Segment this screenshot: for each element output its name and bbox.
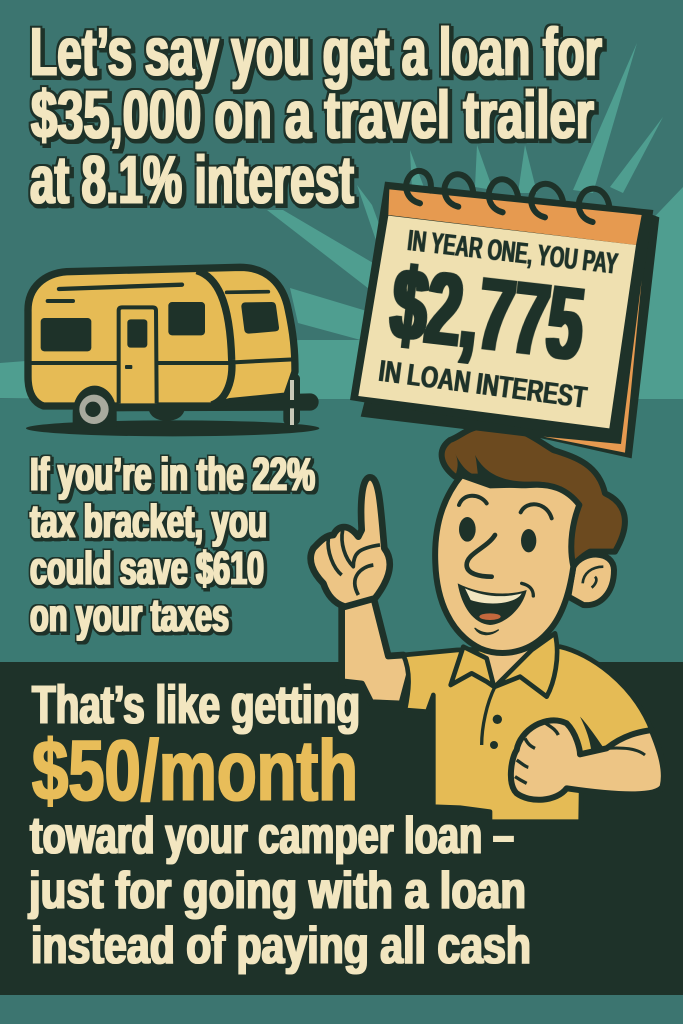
text block: tax bracket savings: on your taxes	[30, 589, 229, 641]
title	[30, 14, 602, 218]
man eyes	[459, 517, 536, 552]
calendar back page	[361, 210, 659, 458]
man fist arm and sleeve	[511, 717, 664, 800]
man right arm raised	[342, 597, 413, 704]
trailer axle bump	[148, 408, 185, 421]
man nose	[467, 535, 495, 577]
calendar orange back edge	[543, 280, 642, 453]
man hair back	[442, 425, 625, 568]
man hair lock	[455, 453, 579, 505]
title: at 8.1% interest	[30, 142, 354, 218]
illustration: pointing man	[311, 425, 664, 822]
calendar paper	[358, 216, 636, 428]
text: instead of paying all cash: instead of paying all cash	[31, 917, 531, 975]
text block: bottom message	[28, 675, 531, 975]
dark lower panel	[0, 662, 683, 995]
trailer jack highlights	[290, 380, 294, 425]
text block: tax bracket savings: could save $610	[30, 542, 264, 594]
text: fifty dollars a month: $50/month	[32, 723, 358, 819]
calendar card	[350, 171, 659, 458]
text block: tax bracket savings: tax bracket, you	[30, 495, 267, 547]
text: toward your camper loan: toward your camper loan –	[30, 807, 514, 865]
trailer trim lines	[30, 285, 293, 363]
text block: tax bracket savings	[30, 448, 315, 641]
man collar	[451, 633, 557, 697]
calendar orange header	[388, 189, 642, 245]
man shirt placket and buttons	[482, 687, 502, 749]
background: sunburst rays	[0, 43, 683, 402]
trailer jack stand	[283, 374, 300, 425]
man face	[435, 475, 579, 653]
trailer ground shadow	[26, 420, 319, 436]
calendar front frame	[350, 182, 653, 443]
text: that's like getting: That’s like getting	[32, 675, 360, 735]
trailer chassis and hitch	[113, 393, 319, 411]
man ear	[568, 555, 614, 605]
calendar text: in loan interest: IN LOAN INTEREST	[377, 354, 589, 415]
man mouth	[458, 583, 533, 635]
man eyebrows	[459, 496, 552, 518]
man neck	[485, 650, 533, 688]
man pointing hand	[311, 477, 390, 607]
trailer body	[28, 267, 295, 406]
trailer rear divider	[197, 271, 232, 405]
text block: tax bracket savings: If you’re in the 22%	[30, 448, 315, 500]
icon: travel trailer	[26, 267, 319, 436]
man shirt	[403, 647, 652, 822]
trailer wheel	[73, 386, 117, 427]
text: just for going with a loan: just for going with a loan	[28, 862, 526, 920]
trailer windows	[41, 302, 279, 351]
trailer door	[119, 307, 157, 403]
background: horizon ground	[0, 399, 683, 662]
calendar spiral rings	[406, 171, 609, 222]
